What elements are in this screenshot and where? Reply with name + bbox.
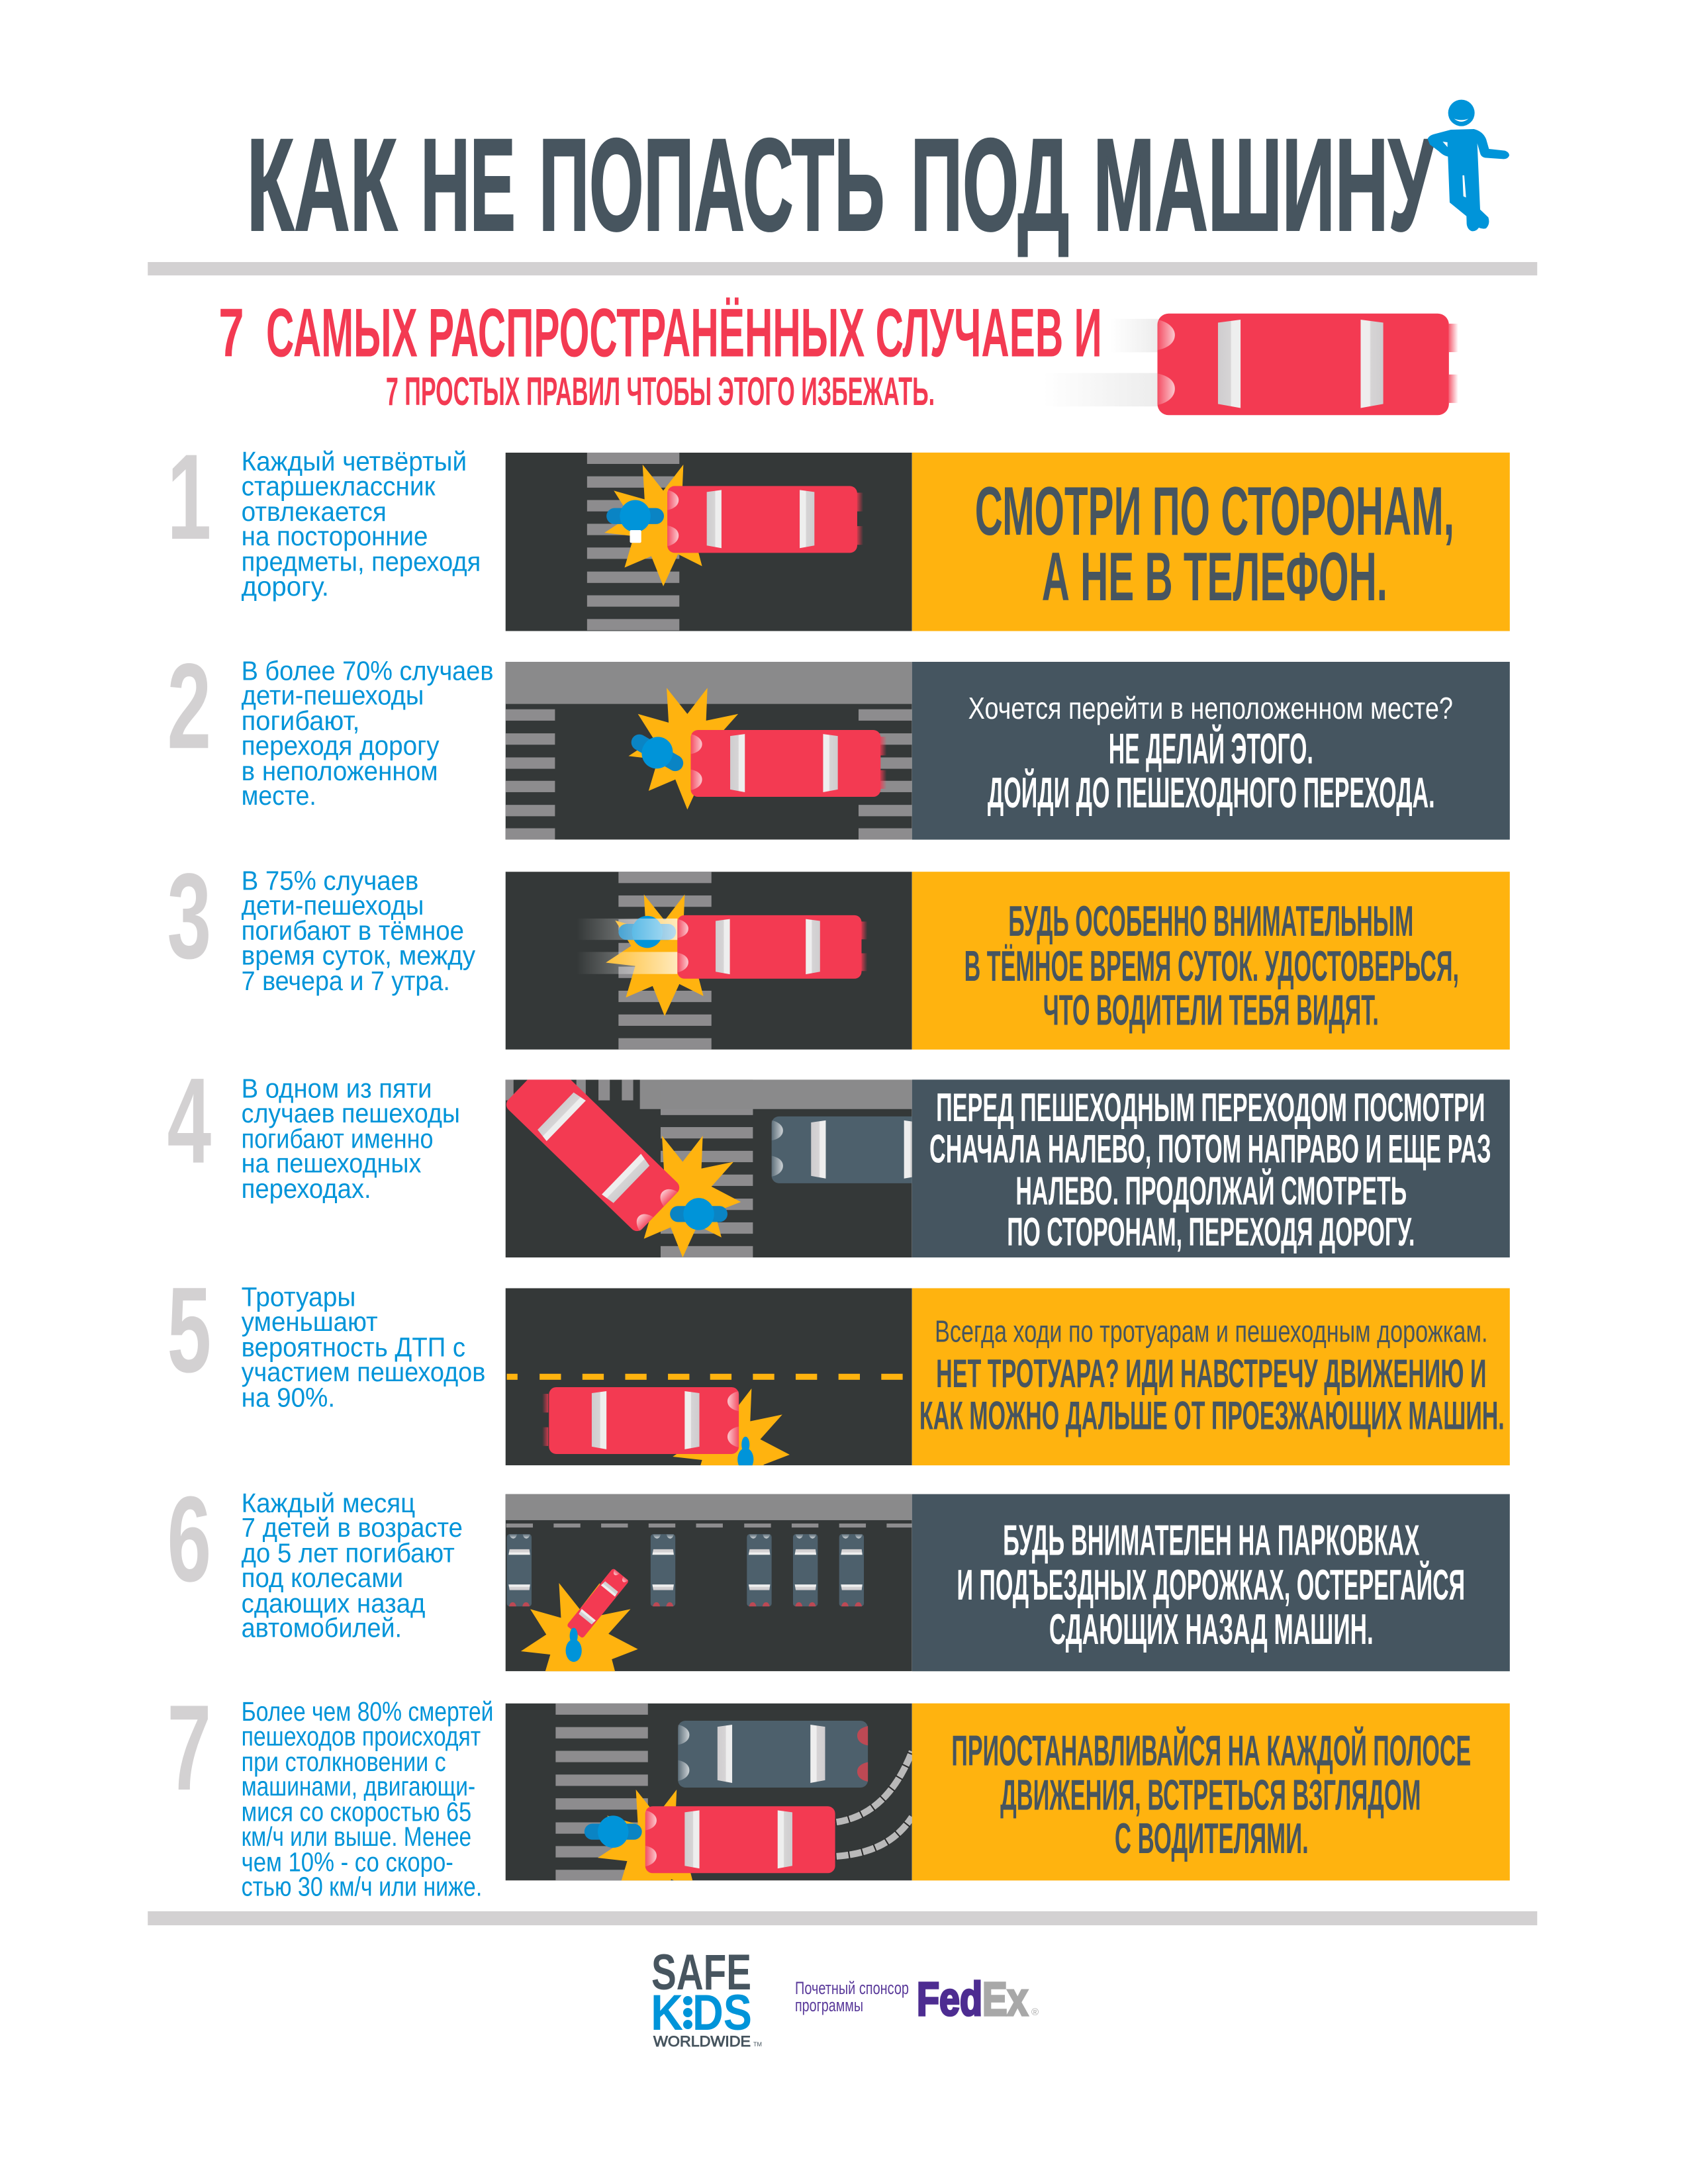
fact text 3: 7 вечера и 7 утра.	[242, 966, 450, 996]
fact text 5: на 90%.	[242, 1382, 335, 1412]
fact text 7: пешеходов происходят	[242, 1721, 481, 1751]
fact text 7: км/ч или выше. Менее	[242, 1821, 471, 1852]
rule panel 5	[912, 1288, 1510, 1465]
fact text 6	[242, 1488, 463, 1643]
fact text 7: при столкновении с	[242, 1747, 446, 1777]
fact text 6: до 5 лет погибают	[242, 1538, 455, 1569]
fact text 2: месте.	[242, 780, 316, 811]
number 5: 5	[167, 1262, 211, 1398]
fact text 5: участием пешеходов	[242, 1357, 485, 1387]
fact text 2: погибают,	[242, 705, 359, 736]
sponsor caption: программы	[795, 1995, 863, 2015]
rule panel 1: А НЕ В ТЕЛЕФОН.	[1042, 539, 1387, 615]
fact text 7: мися со скоростью 65	[242, 1797, 471, 1827]
fact text 4: погибают именно	[242, 1123, 434, 1154]
scene 3: night collision with headlight beams	[506, 872, 912, 1050]
panel: case 1	[167, 429, 1510, 631]
panel: case 2	[167, 638, 1510, 840]
logo: Safe Kids Worldwide: WORLDWIDE	[653, 2033, 751, 2050]
title: МАШИНУ	[1094, 111, 1435, 257]
fact text 1: дорогу.	[242, 571, 329, 602]
fact text 3: В 75% случаев	[242, 865, 418, 895]
fact text 1: отвлекается	[242, 496, 387, 527]
fact text 2: в неположенном	[242, 756, 438, 786]
rule panel 3	[912, 872, 1510, 1050]
fact text 7: машинами, двигающи-	[242, 1771, 475, 1801]
sponsor caption: Почетный спонсор	[795, 1978, 909, 1998]
fact text 7: стью 30 км/ч или ниже.	[242, 1872, 482, 1902]
panel: case 7	[167, 1680, 1510, 1911]
fact text 4: на пешеходных	[242, 1148, 421, 1179]
panel: case 4	[167, 1053, 1510, 1257]
subtitle line 1	[218, 295, 1102, 371]
fact text 5: уменьшают	[242, 1306, 378, 1337]
logo: Safe Kids Worldwide: TM	[753, 2041, 762, 2048]
fact text 1: Каждый четвёртый	[242, 446, 467, 477]
logo: Safe Kids Worldwide: K	[651, 1985, 683, 2041]
fact text 2: В более 70% случаев	[242, 655, 493, 686]
number 4: 4	[167, 1053, 211, 1189]
logo: Safe Kids Worldwide	[651, 1944, 762, 2050]
fact text 2: дети-пешеходы	[242, 680, 424, 711]
scene 2: crossing in the wrong place	[506, 662, 912, 840]
title: ПОД	[911, 111, 1069, 257]
fact text 2	[242, 655, 493, 811]
panel: case 3	[167, 848, 1510, 1050]
rule panel 5: Всегда ходи по тротуарам и пешеходным дорожкам.	[935, 1314, 1487, 1348]
panel: case 5	[167, 1262, 1510, 1510]
fact text 6: под колесами	[242, 1563, 403, 1593]
scene 6: parking lot reversing car	[506, 1494, 912, 1672]
scene 4: turning car at intersection	[506, 1079, 912, 1257]
rule panel 4	[912, 1079, 1510, 1257]
fact text 3: дети-пешеходы	[242, 890, 424, 921]
rule panel 1	[912, 453, 1510, 631]
rule panel 2	[912, 662, 1510, 840]
fact text 7: чем 10% - со скоро-	[242, 1846, 453, 1877]
number 2: 2	[167, 638, 211, 774]
title: ПОПАСТЬ	[539, 111, 884, 257]
title: НЕ	[420, 111, 516, 257]
number 1: 1	[167, 429, 211, 565]
rule panel 7: С ВОДИТЕЛЯМИ.	[1115, 1814, 1309, 1862]
number 7: 7	[167, 1680, 211, 1815]
fact text 4: В одном из пяти	[242, 1073, 432, 1104]
rule panel 2: Хочется перейти в неположенном месте?	[968, 691, 1453, 725]
logo: Safe Kids Worldwide: SAFE	[651, 1944, 751, 2001]
logo: FedEx	[917, 1974, 1039, 2026]
fact text 1: старшеклассник	[242, 471, 436, 501]
rule panel 2: НЕ ДЕЛАЙ ЭТОГО.	[1109, 725, 1313, 773]
fact text 4: случаев пешеходы	[242, 1098, 460, 1128]
sponsor caption	[795, 1978, 909, 2015]
fact text 7: Более чем 80% смертей	[242, 1696, 493, 1727]
panel: case 6	[167, 1471, 1510, 1705]
rule panel 6: СДАЮЩИХ НАЗАД МАШИН.	[1049, 1605, 1374, 1653]
top divider	[148, 262, 1537, 275]
fact text 6: автомобилей.	[242, 1613, 402, 1643]
fact text 3	[242, 865, 476, 996]
logo: FedEx: Fed	[917, 1974, 982, 2026]
fact text 3: время суток, между	[242, 940, 476, 971]
fact text 2: переходя дорогу	[242, 730, 440, 760]
fact text 5	[242, 1282, 485, 1412]
icon: leaning blue pedestrian	[1428, 100, 1509, 231]
bottom divider	[148, 1911, 1537, 1925]
fact text 1: предметы, переходя	[242, 547, 481, 577]
logo: FedEx: Ex	[982, 1974, 1028, 2026]
fact text 4	[242, 1073, 460, 1204]
fact text 5: Тротуары	[242, 1282, 355, 1312]
scene 7: speeding car with skid marks	[506, 1704, 912, 1881]
title: КАК	[247, 111, 398, 257]
number 6: 6	[167, 1471, 211, 1607]
scene 5: road edge without sidewalk	[506, 1288, 912, 1465]
rule panel 6	[912, 1494, 1510, 1671]
fact text 3: погибают в тёмное	[242, 915, 464, 946]
subtitle line 1: 7	[218, 295, 244, 371]
fact text 1: на посторонние	[242, 521, 428, 551]
title	[247, 111, 1435, 257]
fact text 7	[242, 1696, 493, 1902]
logo: Safe Kids Worldwide: DS	[692, 1985, 752, 2041]
fact text 6: 7 детей в возрасте	[242, 1512, 463, 1543]
fact text 4: переходах.	[242, 1173, 371, 1204]
fact text 6: Каждый месяц	[242, 1488, 415, 1518]
icon: speeding red car	[1043, 314, 1458, 415]
rule panel 3: ЧТО ВОДИТЕЛИ ТЕБЯ ВИДЯТ.	[1043, 985, 1379, 1034]
subtitle line 2: 7 ПРОСТЫХ ПРАВИЛ ЧТОБЫ ЭТОГО ИЗБЕЖАТЬ.	[386, 369, 935, 414]
fact text 5: вероятность ДТП с	[242, 1332, 465, 1362]
rule panel 7	[912, 1704, 1510, 1880]
number 3: 3	[167, 848, 211, 983]
logo: FedEx: ®	[1031, 2007, 1039, 2018]
fact text 6: сдающих назад	[242, 1588, 425, 1618]
scene 1: phone user on crossing	[506, 453, 912, 631]
fact text 1	[242, 446, 481, 602]
